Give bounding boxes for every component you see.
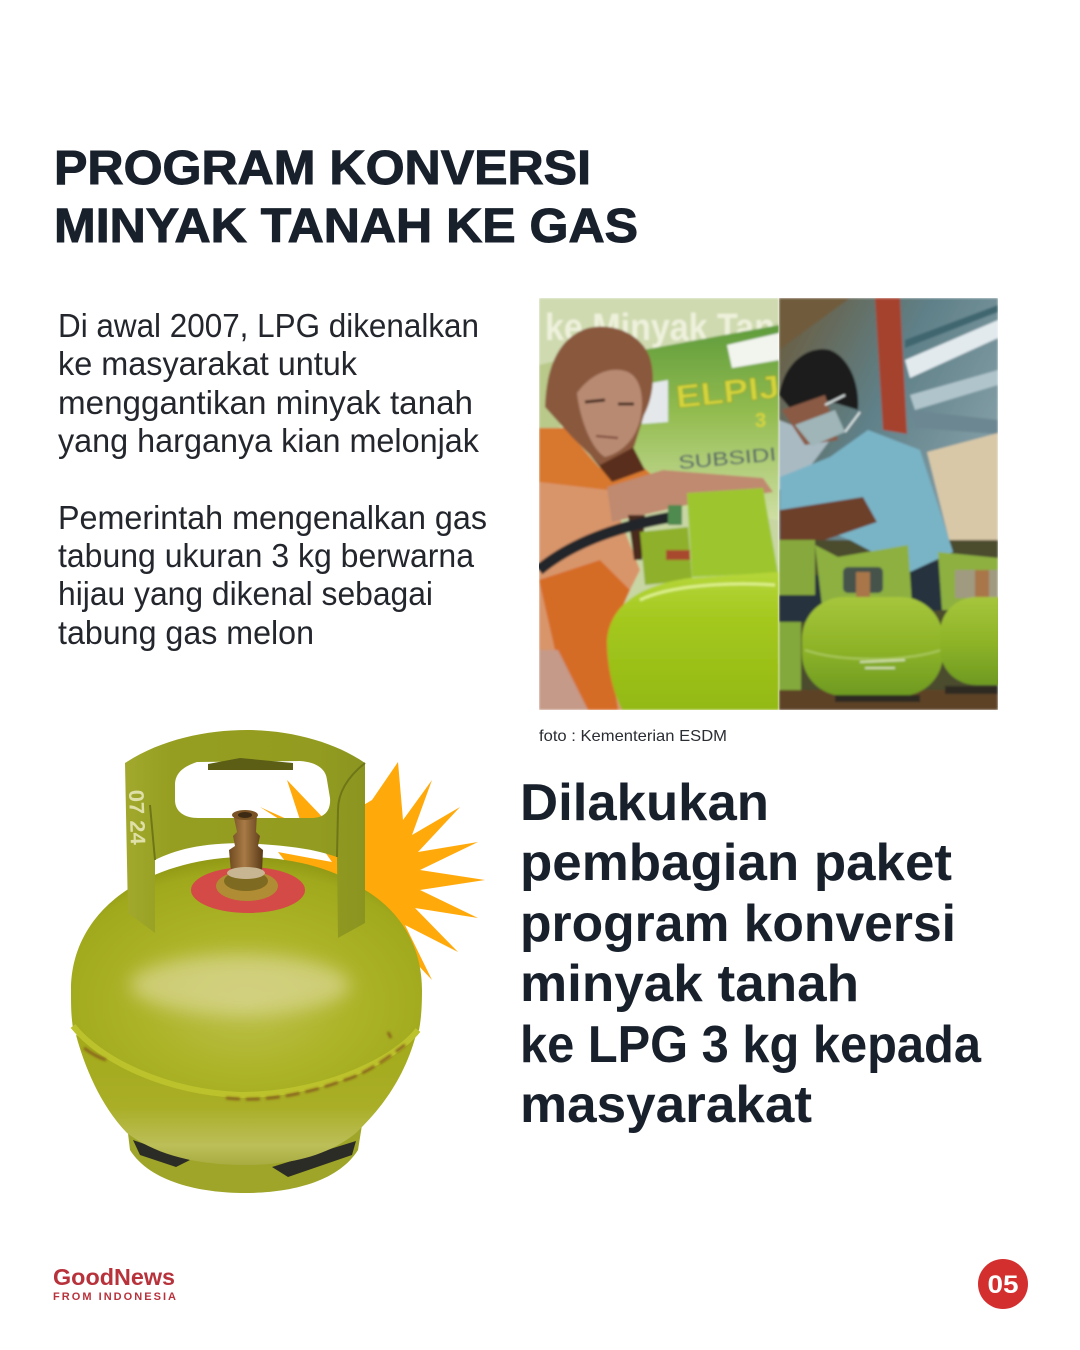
text block: intro paragraph: Di awal 2007, LPG dikenalkan [58,307,479,344]
rust along seam [84,1032,405,1099]
text block: intro paragraph [58,307,479,459]
brass valve base [216,871,278,901]
callout text: minyak tanah [520,955,859,1013]
crate [927,433,998,555]
carrying collar with handle hole [125,730,365,938]
cylinder base ring [127,1125,362,1193]
photo: masked worker with green cylinders [779,298,998,710]
lower background [779,540,998,695]
photo: woman filling green LPG cylinder: 3 [755,410,766,432]
text block: second paragraph: tabung gas melon [58,614,314,651]
floor [779,690,998,710]
arm [780,497,877,540]
face [577,370,642,457]
brass valve stem [229,813,263,872]
logo: GoodNews from Indonesia: FROM INDONESIA [53,1291,176,1303]
photo: woman filling green LPG cylinder: ELPIJ [674,368,781,415]
title [54,142,638,253]
text block: intro paragraph: ke masyarakat untuk [58,345,357,382]
blouse [539,470,640,710]
photo: woman filling green LPG cylinder: ke Minyak Tan [545,307,775,349]
cylinder body upper half [71,857,422,1092]
icon: orange starburst [260,762,485,980]
collar [640,527,692,585]
collar stamped marks: 07 24 [124,789,149,845]
photo caption: foto : Kementerian ESDM [539,728,727,745]
photo: woman filling green LPG cylinder [539,298,781,710]
text block: intro paragraph: yang harganya kian melonjak [58,422,479,459]
left pale background [779,420,830,490]
pants and shadow [779,560,945,622]
callout text: Dilakukan [520,774,769,832]
text block: second paragraph: hijau yang dikenal sebagai [58,575,433,612]
tank body [607,572,779,710]
arm [607,470,773,522]
right tank [938,552,998,610]
text block: intro paragraph: menggantikan minyak tanah [58,384,473,421]
orange scarf [539,428,655,490]
callout text [520,774,982,1134]
background tanks [779,540,815,595]
base dark slots [133,1140,356,1177]
hijab [545,327,653,465]
hose [539,517,672,570]
logo: GoodNews from Indonesia [53,1264,176,1303]
callout text: ke LPG 3 kg kepada [520,1016,982,1074]
neck shadow [590,445,645,482]
callout text: masyarakat [520,1076,812,1134]
seam band [73,1026,418,1095]
mask [795,410,845,446]
center tank collar [815,545,912,605]
red valve ring [191,867,305,913]
highlight [130,955,350,1015]
photo: woman filling green LPG cylinder: SUBSIDI [678,445,777,474]
logo: GoodNews from Indonesia: GoodNews [53,1264,175,1290]
page number badge [978,1259,1028,1309]
collar wing shading [150,763,365,860]
text block: second paragraph: tabung ukuran 3 kg berwarna [58,537,475,574]
title: MINYAK TANAH KE GAS [54,200,638,253]
illustration: green 3 kg LPG cylinder [71,730,422,1193]
text block: second paragraph [58,499,487,651]
text block: second paragraph: Pemerintah mengenalkan gas [58,499,487,536]
pillar [875,298,907,434]
callout text: program konversi [520,895,956,953]
center tank body [802,597,943,696]
shirt [780,430,953,572]
head [779,349,858,420]
title: PROGRAM KONVERSI [54,142,591,195]
collar inner slit [208,758,293,770]
callout text: pembagian paket [520,834,952,892]
page number badge: 05 [988,1271,1019,1299]
cylinder body lower half [76,1035,416,1165]
